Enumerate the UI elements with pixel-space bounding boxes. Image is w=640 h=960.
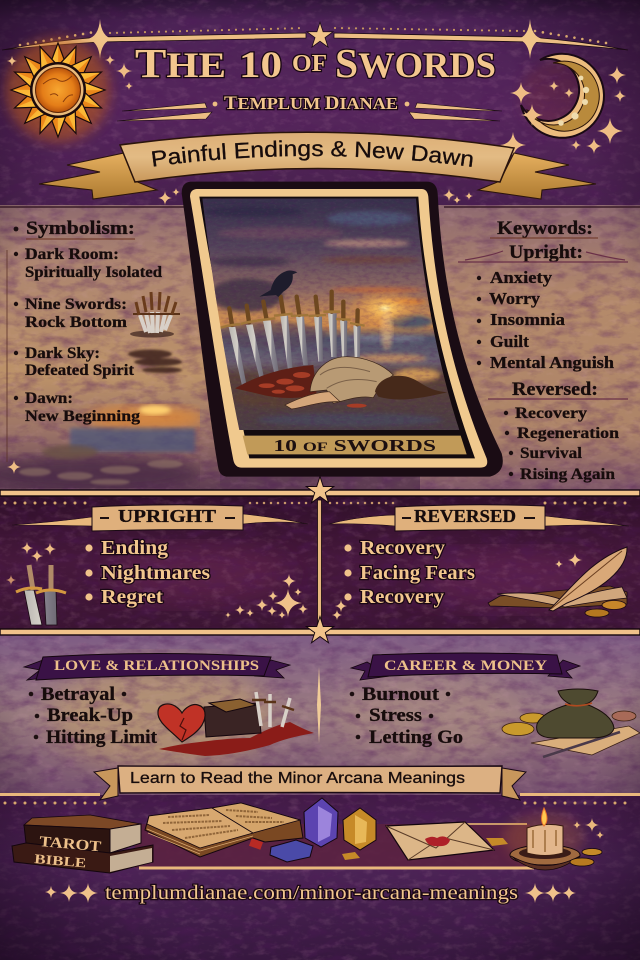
- panel: symbolism: [0, 207, 205, 492]
- divider with star: upper: [0, 475, 640, 504]
- list: upright: Regret: [101, 587, 164, 608]
- subtitle: Templum Dianae: TEMPLUM DIANAE: [224, 93, 398, 114]
- icon: broken heart: [158, 704, 205, 742]
- list: love: [29, 685, 158, 748]
- icon: small swords: [130, 292, 180, 338]
- panel: keywords: [444, 207, 640, 483]
- icon: money bag: [537, 689, 614, 738]
- ribbon: career and money: CAREER & MONEY: [384, 658, 547, 674]
- heading: reversed keywords: Reversed:: [512, 380, 598, 400]
- text: dawn: New Beginning: [25, 408, 140, 425]
- icon: open book: [145, 803, 303, 857]
- heading: upright keywords: Upright:: [509, 242, 583, 263]
- text: dark sky: Defeated Spirit: [25, 362, 135, 379]
- list: upright keywords: Insomnia: [490, 310, 565, 329]
- icon: crescent moon: [521, 54, 604, 138]
- ribbon banner: learn to read: Learn to Read the Minor Arcana Meanings: [130, 770, 465, 787]
- text: nine swords: Rock Bottom: [25, 314, 127, 331]
- divider with star: lower: [0, 615, 640, 644]
- banner: upright: UPRIGHT: [118, 506, 216, 526]
- heading: upright keywords: [458, 242, 628, 263]
- text: nine swords: Nine Swords:: [25, 296, 127, 313]
- list: upright keywords: Worry: [489, 289, 541, 308]
- list: reversed keywords: Regeneration: [517, 425, 619, 442]
- text: dark room: Dark Room:: [25, 246, 119, 263]
- top divider with stars: [2, 19, 628, 59]
- divider: bottom section: [0, 793, 640, 803]
- list: career: Burnout: [362, 685, 440, 705]
- text: dark sky: Dark Sky:: [25, 345, 100, 362]
- text: dawn: Dawn:: [25, 390, 73, 407]
- banner: reversed: [329, 505, 629, 531]
- table: [135, 823, 534, 870]
- icon: book and quill: [332, 547, 627, 620]
- raven: [259, 271, 297, 297]
- text: dawn: [14, 390, 140, 425]
- panel: love and relationships: [24, 654, 314, 756]
- heading: reversed keywords: [488, 380, 628, 400]
- list: reversed keywords: [504, 405, 619, 483]
- website url: [45, 882, 576, 904]
- subtitle: Templum Dianae: [117, 93, 502, 121]
- panel: reversed: [329, 505, 629, 620]
- website url: templumdianae.com/minor-arcana-meanings: [105, 882, 518, 904]
- decorative sparkles: top: [7, 55, 626, 205]
- title: SWORDS: [335, 40, 496, 86]
- icon: blood: [159, 722, 314, 756]
- title: 10: [239, 45, 282, 86]
- list: reversed keywords: Recovery: [515, 405, 587, 422]
- icon: tarot and bible books: TAROT: [39, 834, 102, 855]
- list: reversed keywords: Survival: [520, 445, 583, 462]
- icon: crystals: [270, 798, 376, 862]
- card label: 10 OF SWORDS: [273, 436, 436, 455]
- list: career: Stress: [369, 706, 422, 726]
- ribbon: love and relationships: LOVE & RELATIONSHIPS: [54, 658, 259, 674]
- card illustration: [197, 195, 467, 433]
- ribbon banner: learn to read: [94, 766, 526, 800]
- list: upright: [85, 538, 210, 608]
- text: dark room: [14, 246, 162, 281]
- list: upright keywords: Anxiety: [490, 268, 553, 287]
- icon: envelope with seal: [386, 822, 494, 860]
- list: upright: Ending: [101, 538, 168, 559]
- heading: keywords: Keywords:: [497, 218, 593, 239]
- list: reversed keywords: Rising Again: [520, 466, 615, 483]
- icon: chest: [204, 692, 294, 737]
- icon: coins: [502, 711, 636, 736]
- banner: upright: [12, 505, 308, 531]
- title: OF: [292, 51, 327, 77]
- vertical divider: [318, 500, 322, 624]
- icon: two swords: [6, 542, 66, 625]
- banner: reversed: REVERSED: [414, 506, 516, 526]
- icon: dark cloud: [128, 350, 182, 373]
- list: love: Hitting Limit: [46, 728, 158, 748]
- ribbon banner: Painful Endings & New Dawn: [38, 132, 596, 200]
- center glow line: [317, 667, 321, 743]
- title: THE: [135, 40, 226, 86]
- heading: symbolism: Symbolism:: [26, 218, 135, 239]
- icon: tarot and bible books: BIBLE: [34, 851, 87, 871]
- panel: career and money: [350, 653, 640, 757]
- list: reversed: Facing Fears: [360, 563, 475, 584]
- ribbon: career and money: [351, 653, 580, 680]
- list: upright keywords: Guilt: [490, 332, 530, 351]
- list: reversed: [344, 538, 475, 608]
- swords: [221, 292, 365, 386]
- list: reversed: Recovery: [360, 538, 445, 559]
- list: career: [350, 685, 463, 748]
- icon: candle: [504, 808, 602, 870]
- decorative coins and sparkles: [342, 818, 604, 860]
- list: upright: Nightmares: [101, 563, 210, 584]
- list: reversed: Recovery: [360, 587, 444, 608]
- text: nine swords: [14, 296, 127, 331]
- list: upright keywords: Mental Anguish: [490, 353, 614, 372]
- sparkle cluster: [225, 574, 308, 619]
- list: upright keywords: [477, 268, 614, 372]
- ribbon: love and relationships: [24, 654, 290, 680]
- list: love: Break-Up: [47, 706, 133, 726]
- ribbon banner: Painful Endings & New Dawn: Painful Endings & New Dawn: [152, 140, 473, 167]
- icon: tarot and bible books: [12, 815, 153, 873]
- card label: [243, 436, 467, 455]
- list: career: Letting Go: [369, 728, 463, 748]
- blood and fallen figure: [235, 357, 447, 409]
- text: dark room: Spiritually Isolated: [25, 264, 162, 281]
- text: dark sky: [14, 345, 135, 379]
- icon: sun: [6, 38, 110, 142]
- tarot card: [182, 182, 503, 477]
- icon: paper and pen: [531, 726, 640, 757]
- list: love: Betrayal: [41, 685, 115, 705]
- panel: upright: [6, 505, 308, 625]
- title: [135, 40, 496, 86]
